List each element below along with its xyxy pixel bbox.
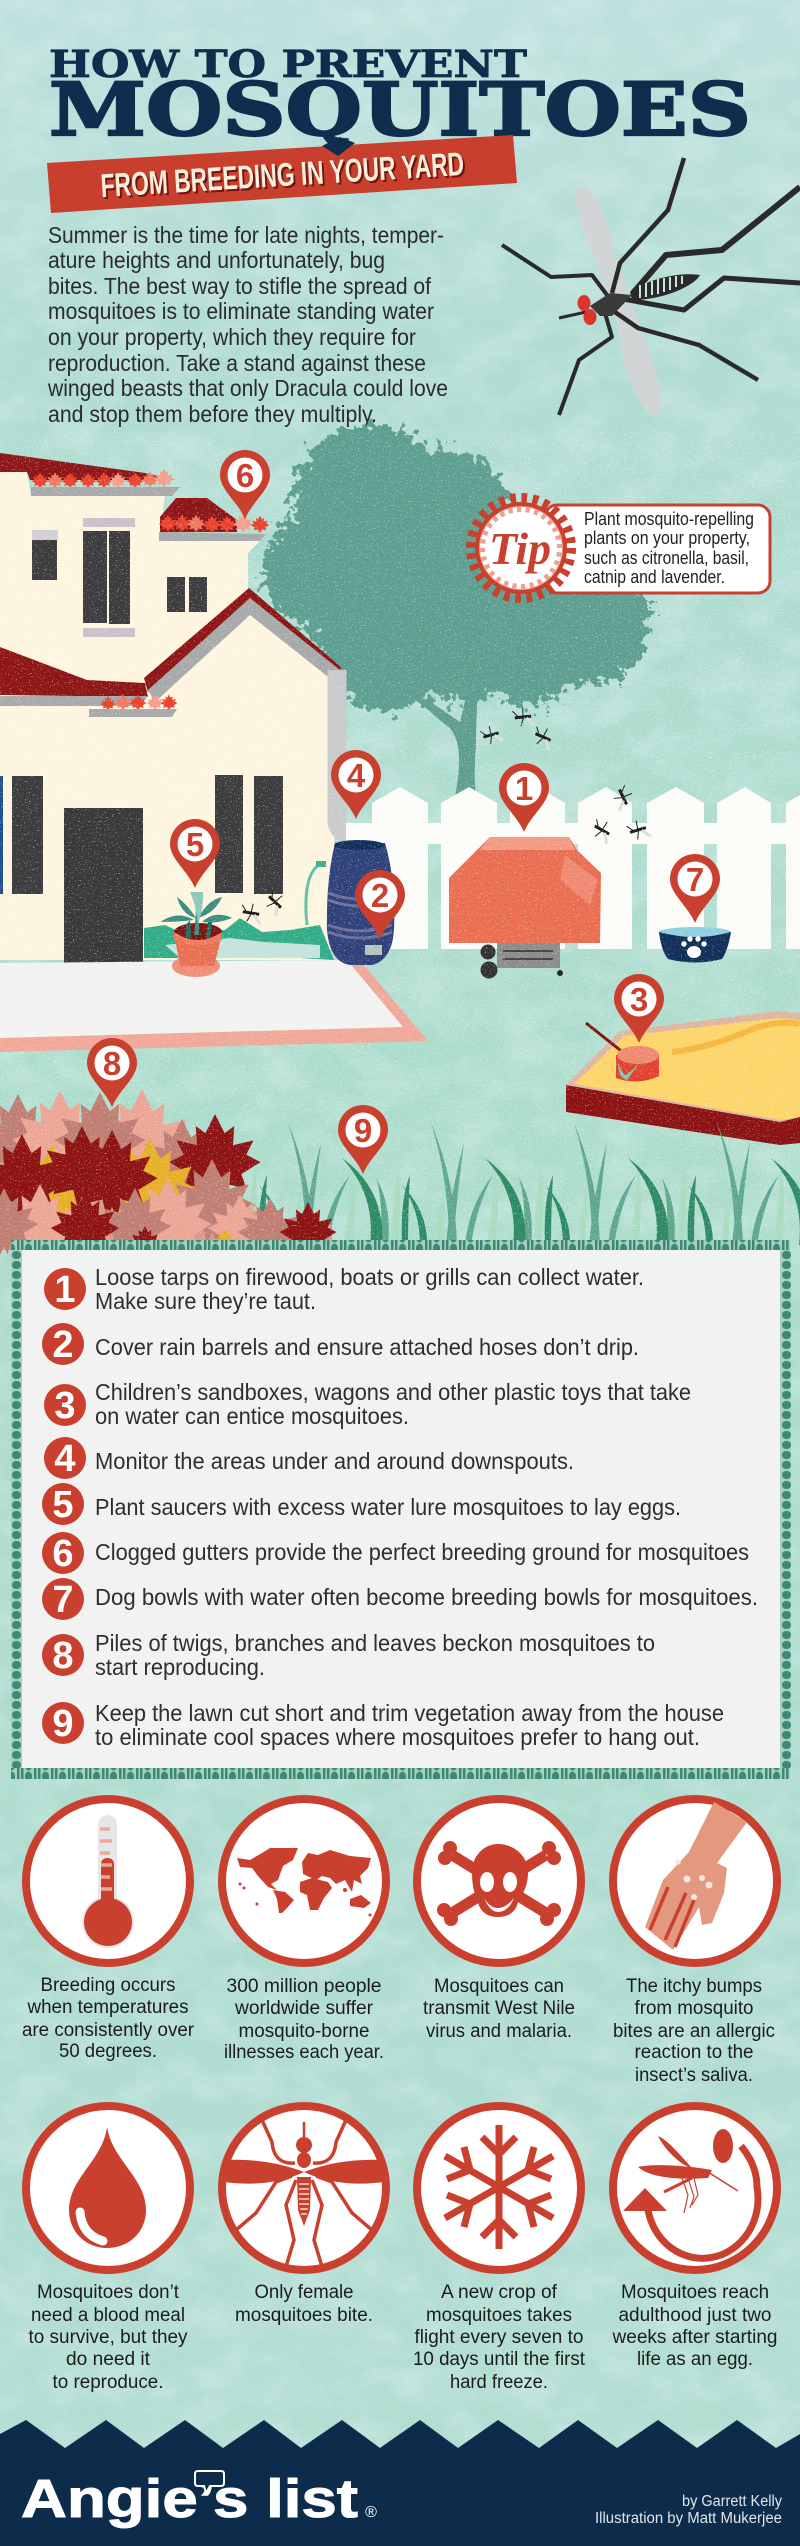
pin 4 [331, 750, 381, 819]
item 6: 6 [52, 1533, 74, 1575]
pin 1 [499, 763, 549, 832]
caption: Mosquitoes don’t [37, 2282, 180, 2303]
intro text [47, 222, 448, 427]
byline: Illustration by Matt Mukerjee [595, 2510, 782, 2527]
grill [449, 837, 601, 978]
caption: reaction to the [634, 2042, 754, 2063]
caption: life as an egg. [637, 2349, 753, 2370]
fact 6: female mosquito [222, 2106, 386, 2326]
caption: virus and malaria. [426, 2021, 572, 2042]
left lower gutter [0, 696, 148, 706]
icon: snowflake [445, 2125, 553, 2249]
gable roof [144, 588, 342, 692]
mosquito eyes [578, 295, 590, 311]
intro text: and stop them before they multiply. [48, 401, 377, 427]
fact 3: skull [417, 1799, 581, 2042]
logo: angie's list: Angie’s list [21, 2469, 358, 2529]
fact 2: world map [222, 1799, 386, 2063]
item 1: Loose tarps on firewood, boats or grills can collect water. [95, 1264, 644, 1290]
caption: insect’s saliva. [635, 2065, 753, 2086]
banner: from breeding in your yard: FROM BREEDING IN YOUR YARD [100, 145, 465, 204]
item 2 [42, 1323, 639, 1366]
item 9: to eliminate cool spaces where mosquitoes prefer to hang out. [95, 1724, 700, 1750]
caption: Breeding occurs [40, 1975, 176, 1996]
icon: thermometer [82, 1815, 134, 1948]
caption [22, 1975, 195, 2062]
dog bowl [659, 927, 731, 962]
mosquito wings [576, 186, 661, 417]
bucket [586, 1023, 625, 1054]
pin 1: 1 [515, 770, 533, 807]
tip box: plants on your property, [584, 528, 750, 548]
pin 3: 3 [630, 981, 648, 1018]
item 7: 7 [52, 1579, 74, 1621]
fact 4: hand [613, 1799, 777, 2086]
intro text: ature heights and unfortunately, bug [48, 247, 385, 273]
byline: by Garrett Kelly [682, 2493, 782, 2510]
caption: transmit West Nile [423, 1998, 575, 2019]
caption: Only female [254, 2282, 354, 2303]
title line: mosquitoes: MOSQUITOES [49, 67, 751, 153]
caption: 300 million people [226, 1976, 382, 1997]
item 3: on water can entice mosquitoes. [95, 1403, 409, 1429]
fence [340, 787, 800, 949]
caption: weeks after starting [611, 2327, 778, 2348]
intro text: mosquitoes is to eliminate standing water [48, 298, 434, 324]
caption [423, 1976, 575, 2042]
pin 4: 4 [347, 757, 366, 794]
icon: mosquito [224, 2120, 384, 2270]
icon: life cycle [623, 2129, 758, 2258]
icon: skull and crossbones [437, 1841, 561, 1926]
item 1: 1 [54, 1269, 76, 1311]
fact 5: blood drop [26, 2106, 190, 2393]
sand [574, 1018, 800, 1120]
caption: Mosquitoes reach [621, 2282, 769, 2303]
item 8 [42, 1630, 655, 1680]
byline [595, 2493, 782, 2527]
icon: world map [237, 1848, 372, 1916]
item 5 [42, 1483, 681, 1526]
caption: Mosquitoes can [434, 1976, 564, 1997]
puddle and hose [144, 861, 334, 960]
illustration speckle [0, 430, 800, 1245]
panel: numbered tips list [11, 1240, 791, 1779]
mosquito abdomen [630, 274, 700, 300]
house [0, 453, 361, 963]
mosquito legs [502, 158, 800, 415]
tree crown [263, 425, 650, 713]
pin 7 [670, 854, 720, 923]
potted plant [160, 892, 232, 977]
logo: angie's list: ® [365, 2504, 377, 2521]
gable trim [148, 598, 340, 702]
dormer gutter [159, 532, 266, 541]
caption: do need it [66, 2349, 151, 2370]
caption: worldwide suffer [234, 1998, 374, 2019]
fact 8: life cycle [611, 2106, 778, 2370]
caption: adulthood just two [618, 2305, 772, 2326]
pin 8 [87, 1038, 137, 1107]
pot [175, 939, 221, 966]
caption: mosquitoes takes [426, 2305, 572, 2326]
item 1 [44, 1264, 644, 1314]
grill wheels [480, 944, 496, 960]
tree trunk [405, 670, 478, 803]
fact 7: snowflake [413, 2106, 586, 2393]
pin 6: 6 [236, 457, 254, 494]
tip box: catnip and lavender. [584, 567, 725, 587]
pin 9 [338, 1105, 388, 1174]
item 9: 9 [52, 1703, 74, 1745]
banner: from breeding in your yard [47, 135, 517, 213]
sandbox side [566, 1085, 800, 1145]
title [49, 42, 751, 153]
small mosquitoes [242, 706, 651, 926]
lower gutter [89, 709, 177, 717]
caption: mosquito-borne [238, 2021, 370, 2042]
caption [235, 2282, 373, 2326]
pin 5: 5 [186, 826, 204, 863]
pin 2 [355, 870, 405, 939]
caption [413, 2282, 586, 2393]
sandbox rim [566, 1011, 800, 1122]
intro text: reproduction. Take a stand against these [48, 350, 426, 376]
item 5: 5 [52, 1484, 74, 1526]
item 8: Piles of twigs, branches and leaves beckon mosquitoes to [95, 1630, 655, 1656]
item 3: Children’s sandboxes, wagons and other plastic toys that take [95, 1379, 691, 1405]
caption: are consistently over [22, 2020, 195, 2041]
tip callout [472, 499, 770, 597]
pin 9: 9 [354, 1112, 372, 1149]
downspout [337, 670, 358, 836]
intro text: winged beasts that only Dracula could love [47, 375, 448, 401]
upper gutter leaves [32, 469, 174, 488]
item 2: 2 [52, 1324, 74, 1366]
caption: need a blood meal [31, 2305, 185, 2326]
pin 3 [614, 974, 664, 1043]
pin 8: 8 [103, 1045, 121, 1082]
caption [28, 2282, 188, 2393]
item 6: Clogged gutters provide the perfect breeding ground for mosquitoes [95, 1539, 749, 1565]
item 2: Cover rain barrels and ensure attached hoses don’t drip. [95, 1334, 639, 1360]
tip box [545, 505, 770, 593]
caption: mosquitoes bite. [235, 2305, 373, 2326]
banner: from breeding in your yard: FROM BREEDING IN YOUR YARD [102, 147, 467, 206]
grass [145, 1123, 800, 1245]
intro text: Summer is the time for late nights, temper- [48, 222, 444, 248]
item 9: Keep the lawn cut short and trim vegetation away from the house [95, 1700, 724, 1726]
rain barrel [327, 840, 394, 965]
caption: to reproduce. [52, 2372, 164, 2393]
caption: 50 degrees. [59, 2041, 157, 2062]
upper roof [0, 453, 175, 480]
left lower roof [0, 647, 148, 697]
upper gutter [31, 487, 180, 496]
item 3: 3 [54, 1385, 76, 1427]
saucer [172, 955, 220, 977]
item 7 [42, 1578, 758, 1621]
tree silhouette [263, 425, 650, 803]
caption [224, 1976, 384, 2063]
fact 1: thermometer [22, 1799, 195, 2062]
tip starburst: Tip [489, 523, 551, 574]
caption: 10 days until the first [413, 2349, 586, 2370]
item 4: 4 [54, 1438, 76, 1480]
item 4 [44, 1437, 574, 1480]
pin 2: 2 [371, 877, 389, 914]
caption: bites are an allergic [613, 2021, 775, 2042]
sandbox [566, 1011, 800, 1145]
footer [0, 2420, 800, 2546]
pin 5 [170, 819, 220, 888]
caption: hard freeze. [450, 2372, 548, 2393]
tip box: such as citronella, basil, [584, 548, 749, 568]
item 7: Dog bowls with water often become breeding bowls for mosquitoes. [95, 1584, 758, 1610]
caption: to survive, but they [28, 2327, 188, 2348]
item 3 [44, 1379, 691, 1429]
icon: paw print [681, 936, 707, 958]
upper wall [0, 472, 340, 960]
icon: blood drop [69, 2127, 146, 2248]
caption: when temperatures [27, 1997, 189, 2018]
dormer gutter leaves [159, 514, 269, 533]
title line: how to prevent: HOW TO PREVENT [49, 42, 528, 86]
item 5: Plant saucers with excess water lure mosquitoes to lay eggs. [95, 1494, 681, 1520]
dormer roof [160, 498, 237, 532]
caption: illnesses each year. [224, 2042, 384, 2063]
caption [613, 1976, 775, 2086]
tip box: Plant mosquito-repelling [584, 509, 754, 529]
lower gutter leaves [100, 694, 177, 711]
caption: from mosquito [634, 1998, 754, 2019]
grill frame [497, 943, 560, 968]
icon: large mosquito [502, 158, 800, 417]
icon: bitten hand [645, 1802, 747, 1950]
tip starburst [472, 499, 570, 597]
caption [611, 2282, 778, 2370]
plant leaves [160, 892, 232, 938]
item 4: Monitor the areas under and around downspouts. [95, 1448, 574, 1474]
tarp [449, 837, 601, 943]
intro text: on your property, which they require for [48, 324, 416, 350]
intro text: bites. The best way to stifle the spread of [48, 273, 432, 299]
caption: flight every seven to [414, 2327, 584, 2348]
leaf pile [0, 1089, 337, 1269]
caption: A new crop of [441, 2282, 558, 2303]
item 8: start reproducing. [95, 1654, 265, 1680]
item 8: 8 [52, 1635, 74, 1677]
pin 6 [220, 450, 270, 519]
patio [0, 960, 428, 1052]
lower windows and door [0, 776, 3, 894]
item 9 [42, 1700, 724, 1750]
item 1: Make sure they’re taut. [95, 1288, 316, 1314]
mosquito thorax [590, 293, 632, 316]
item 6 [42, 1532, 749, 1575]
pin 7: 7 [686, 861, 704, 898]
caption: The itchy bumps [626, 1976, 762, 1997]
upper windows [32, 530, 58, 540]
